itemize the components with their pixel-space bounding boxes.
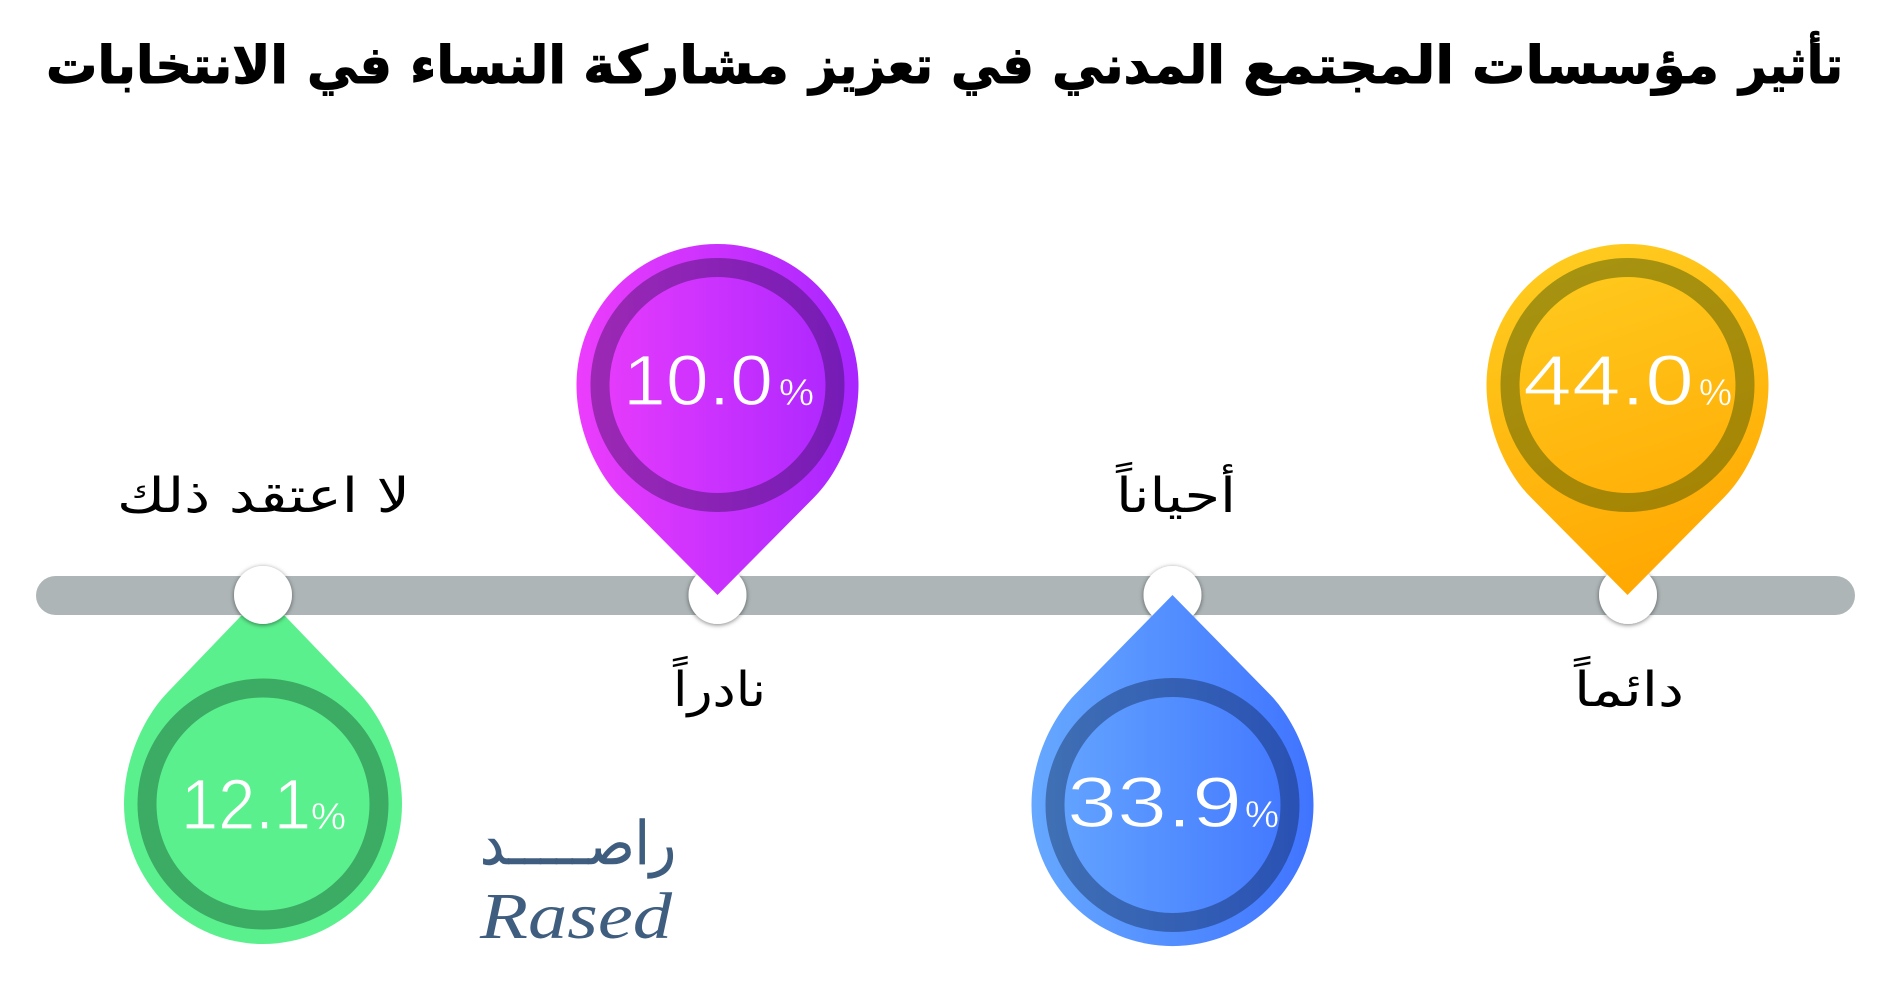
logo Arabic wordmark: راصـــــد	[480, 809, 676, 879]
label: don't think so: لا اعتقد ذلك	[117, 468, 410, 524]
title	[46, 31, 1843, 96]
value: 33.9%: 33.9	[1067, 764, 1242, 843]
pin: green 12.1% don't think so	[124, 593, 402, 944]
timeline node: sometimes	[1144, 566, 1202, 624]
value: 44.0%	[1523, 342, 1732, 421]
pin: purple 10.0% rarely	[576, 244, 858, 595]
title: في	[307, 36, 392, 96]
value: 33.9%	[1067, 764, 1279, 843]
label: rarely: نادراً	[673, 655, 766, 718]
timeline bar	[36, 576, 1855, 615]
title: مؤسسات	[1472, 36, 1719, 96]
timeline node: always	[1599, 566, 1657, 624]
title: تعزيز	[806, 36, 933, 96]
value: 33.9%: %	[1245, 794, 1279, 836]
value: 12.1%: 12.1	[181, 766, 311, 845]
title: في	[951, 36, 1034, 96]
value: 44.0%: %	[1699, 372, 1732, 414]
title: مشاركة	[583, 36, 789, 96]
label: sometimes: أحياناً	[1116, 461, 1236, 524]
value: 10.0%: 10.0	[623, 342, 773, 421]
timeline node: don't think so	[234, 566, 292, 624]
value: 44.0%: 44.0	[1523, 342, 1694, 421]
label: always: دائماً	[1574, 655, 1684, 718]
title: المجتمع	[1243, 36, 1454, 96]
logo Latin wordmark: Rased	[479, 880, 673, 953]
timeline node: rarely	[688, 566, 746, 624]
value: 10.0%: %	[779, 372, 814, 414]
title: الانتخابات	[46, 36, 288, 96]
title: المدني	[1052, 36, 1225, 96]
pin: blue 33.9% sometimes	[1032, 595, 1314, 946]
value: 12.1%: %	[311, 796, 346, 838]
title: تأثير	[1736, 31, 1843, 96]
pin: yellow 44.0% always	[1486, 244, 1768, 595]
logo: Rased	[479, 809, 676, 953]
title: النساء	[410, 36, 566, 96]
